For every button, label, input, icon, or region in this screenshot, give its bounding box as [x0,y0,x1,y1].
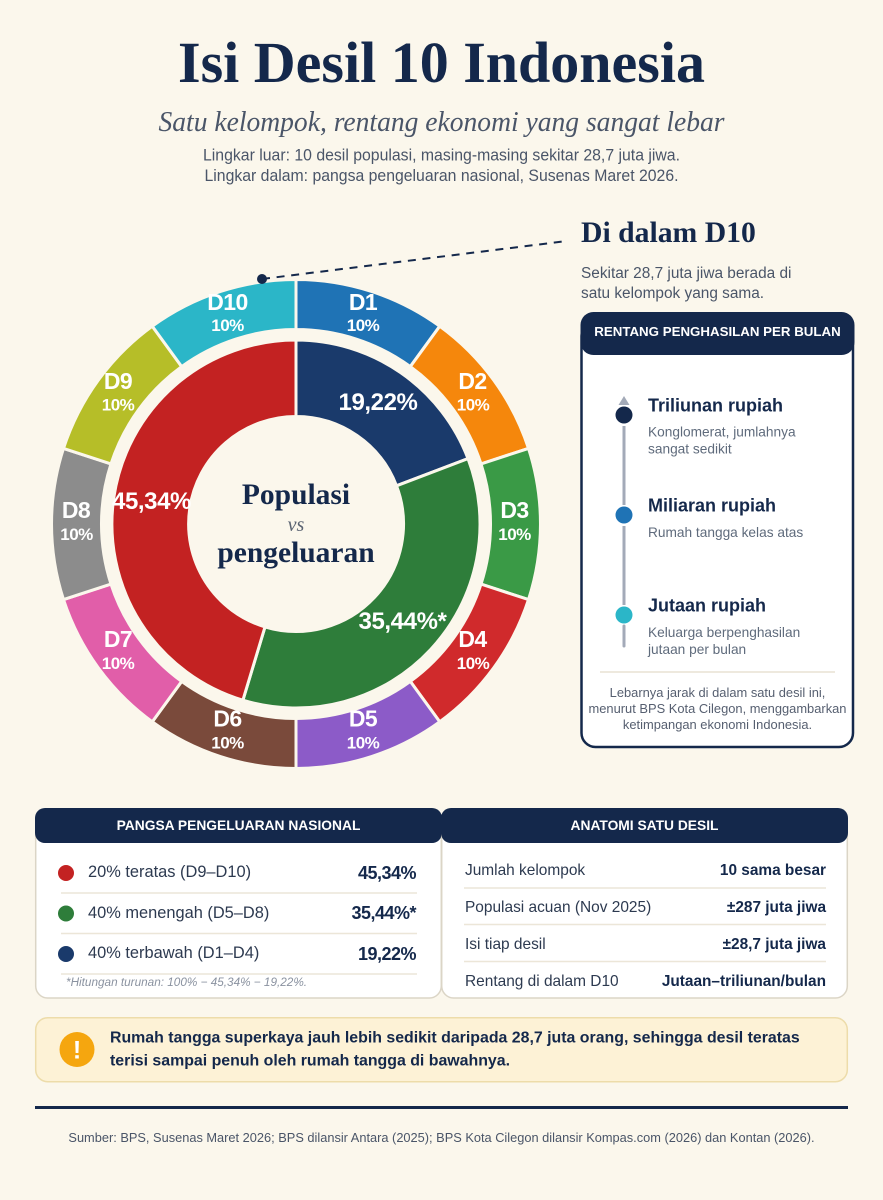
tier: billions: Miliaran rupiah [648,496,776,516]
tier: trillions: Konglomerat, jumlahnya [648,424,796,440]
row: group count: Jumlah kelompok [465,862,585,879]
panel note: menurut BPS Kota Cilegon, menggambarkan [589,701,846,716]
panel header [580,312,854,355]
inner ring labels: 45,34% [112,488,191,515]
tier: millions: Keluarga berpenghasilan [648,625,800,640]
leader line from D10 [257,242,562,284]
D10 description: Sekitar 28,7 juta jiwa berada di [581,265,791,282]
decile labels: 10% [60,525,93,544]
decile labels: D1 [349,289,378,315]
decile labels: 10% [457,654,490,673]
panel header: ANATOMI SATU DESIL [571,818,718,833]
decile labels: D5 [349,706,378,732]
inner ring labels: 35,44%* [359,608,448,635]
footnote: *Hitungan turunan: 100% − 45,34% − 19,22%. [66,976,307,989]
center label: Populasi [242,479,350,511]
callout text: terisi sampai penuh oleh rumah tangga di bawahnya. [110,1052,510,1070]
decile labels: D6 [213,706,242,732]
panel note: Lebarnya jarak di dalam satu desil ini, [610,685,825,700]
D10 description [581,265,791,302]
row: top 20%: 20% teratas (D9–D10) [88,863,251,881]
panel header: PANGSA PENGELUARAN NASIONAL [117,818,360,833]
decile labels: D2 [458,368,487,394]
timeline axis [618,396,630,646]
decile labels: 10% [211,734,244,752]
tier: millions [616,596,800,657]
decile labels: 10% [457,396,490,414]
heading: inside D10: Di dalam D10 [581,217,756,249]
panel: income range [580,312,854,747]
intro text: Lingkar luar: 10 desil populasi, masing-masing sekitar 28,7 juta jiwa. [203,146,680,164]
row: range in D10 [465,973,826,990]
decile labels: D4 [458,626,487,652]
outer ring: population deciles [52,280,540,768]
callout text: Rumah tangga superkaya jauh lebih sedikit daripada 28,7 juta orang, sehingga desil teratas [110,1030,800,1046]
decile labels [60,289,531,752]
decile labels: D10 [207,289,248,315]
center label [217,479,375,569]
row: per decile [465,936,826,953]
row: reference population: Populasi acuan (Nov 2025) [465,899,651,916]
panel header [441,808,848,843]
row: bottom 40% [58,944,416,964]
row: range in D10: Jutaan–triliunan/bulan [662,973,826,990]
icon: warning: ! [73,1036,81,1064]
decile labels: 10% [211,316,244,335]
row: middle 40% [58,903,416,923]
panel header [35,808,442,843]
D10 description: satu kelompok yang sama. [581,285,764,302]
decile labels: D9 [104,368,132,394]
row: range in D10: Rentang di dalam D10 [465,973,619,990]
panel header: RENTANG PENGHASILAN PER BULAN [594,324,841,339]
tier: trillions [616,396,796,456]
center label: pengeluaran [217,537,375,569]
row: per decile: ±28,7 juta jiwa [723,936,826,953]
intro text: Lingkar dalam: pangsa pengeluaran nasional, Susenas Maret 2026. [204,166,678,185]
tier: trillions: Triliunan rupiah [648,396,783,416]
panel note [589,685,846,732]
tier: millions: jutaan per bulan [647,642,746,657]
decile labels: 10% [347,316,380,335]
decile labels: D7 [104,626,132,652]
row: top 20%: 45,34% [358,863,416,883]
callout text [110,1030,800,1070]
row: group count: 10 sama besar [720,862,826,879]
source note: Sumber: BPS, Susenas Maret 2026; BPS dilansir Antara (2025); BPS Kota Cilegon dilansir Kompas.com (2026) dan Kontan (2026). [68,1130,815,1145]
decile labels: 10% [347,734,380,752]
decile labels: 10% [102,654,135,673]
panel note: ketimpangan ekonomi Indonesia. [623,717,812,732]
subtitle: Satu kelompok, rentang ekonomi yang sangat lebar [158,107,725,138]
row: middle 40%: 40% menengah (D5–D8) [88,904,269,922]
row: bottom 40%: 19,22% [358,944,416,964]
decile labels: D8 [62,497,91,523]
inner ring labels [112,389,448,635]
intro text [203,146,680,185]
title: Isi Desil 10 Indonesia [178,30,705,95]
donut chart [52,280,540,768]
decile labels: 10% [102,396,135,414]
inner ring: expenditure share [112,340,480,708]
panel: national expenditure share [35,808,442,998]
row: top 20% [58,863,416,883]
tier: billions [616,496,803,540]
row: group count [465,862,826,879]
row: bottom 40%: 40% terbawah (D1–D4) [88,944,259,962]
row: reference population [465,899,826,916]
center label: vs [288,514,305,536]
panel: anatomy of one decile [441,808,848,998]
inner ring labels: 19,22% [338,389,418,416]
row: reference population: ±287 juta jiwa [727,899,826,916]
icon: warning [60,1032,94,1067]
tier: trillions: sangat sedikit [648,442,732,456]
row: per decile: Isi tiap desil [465,936,546,953]
tier: billions: Rumah tangga kelas atas [648,525,803,540]
decile labels: D3 [500,497,529,523]
callout [36,1018,847,1082]
row: middle 40%: 35,44%* [351,903,416,923]
decile labels: 10% [498,525,531,544]
tier: millions: Jutaan rupiah [648,596,766,616]
